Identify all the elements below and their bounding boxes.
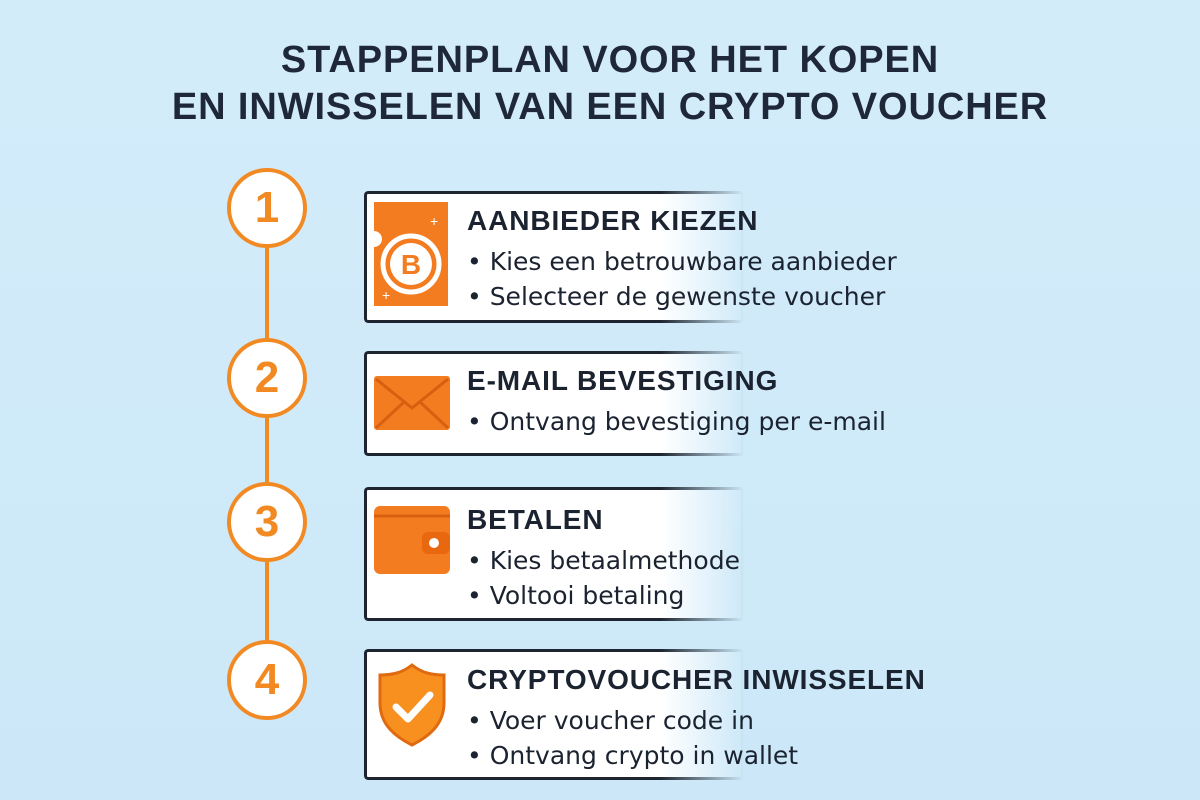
step circle 1: 1 xyxy=(255,183,279,232)
text: step 1 xyxy=(467,205,897,311)
icon: bitcoin voucher: + xyxy=(382,287,390,303)
text: step 3: • Kies betaalmethode xyxy=(467,546,740,575)
text: step 1: • Kies een betrouwbare aanbieder xyxy=(467,247,897,276)
text: step 1: AANBIEDER KIEZEN xyxy=(467,205,758,236)
icon: bitcoin voucher: B xyxy=(401,249,421,280)
step circle 2 xyxy=(227,338,307,418)
title xyxy=(172,39,1048,128)
text: step 3 xyxy=(467,504,740,610)
step circle 1 xyxy=(227,168,307,248)
title: EN INWISSELEN VAN EEN CRYPTO VOUCHER xyxy=(172,86,1048,128)
icon: bitcoin voucher xyxy=(374,202,448,306)
text: step 4: CRYPTOVOUCHER INWISSELEN xyxy=(467,664,926,695)
text: step 4 xyxy=(467,664,926,770)
text: step 2: • Ontvang bevestiging per e-mail xyxy=(467,407,886,436)
icon: wallet xyxy=(374,506,450,574)
step circle 3: 3 xyxy=(255,497,279,546)
step circle 4: 4 xyxy=(255,655,279,704)
card 1 xyxy=(364,191,744,323)
text: step 2 xyxy=(467,365,886,436)
step circle 4 xyxy=(227,640,307,720)
step circle 3 xyxy=(227,482,307,562)
icon: shield check xyxy=(378,663,446,747)
icon: bitcoin voucher: + xyxy=(430,213,438,229)
card 4 xyxy=(364,649,744,780)
text: step 4: • Ontvang crypto in wallet xyxy=(467,741,798,770)
timeline connector xyxy=(265,240,269,650)
title: STAPPENPLAN VOOR HET KOPEN xyxy=(281,39,939,81)
icon: envelope xyxy=(374,376,450,430)
text: step 3: BETALEN xyxy=(467,504,603,535)
text: step 4: • Voer voucher code in xyxy=(467,706,754,735)
text: step 3: • Voltooi betaling xyxy=(467,581,684,610)
text: step 2: E-MAIL BEVESTIGING xyxy=(467,365,778,396)
step circle 2: 2 xyxy=(255,353,279,402)
card 2 xyxy=(364,351,744,456)
card 3 xyxy=(364,487,744,621)
text: step 1: • Selecteer de gewenste voucher xyxy=(467,282,885,311)
